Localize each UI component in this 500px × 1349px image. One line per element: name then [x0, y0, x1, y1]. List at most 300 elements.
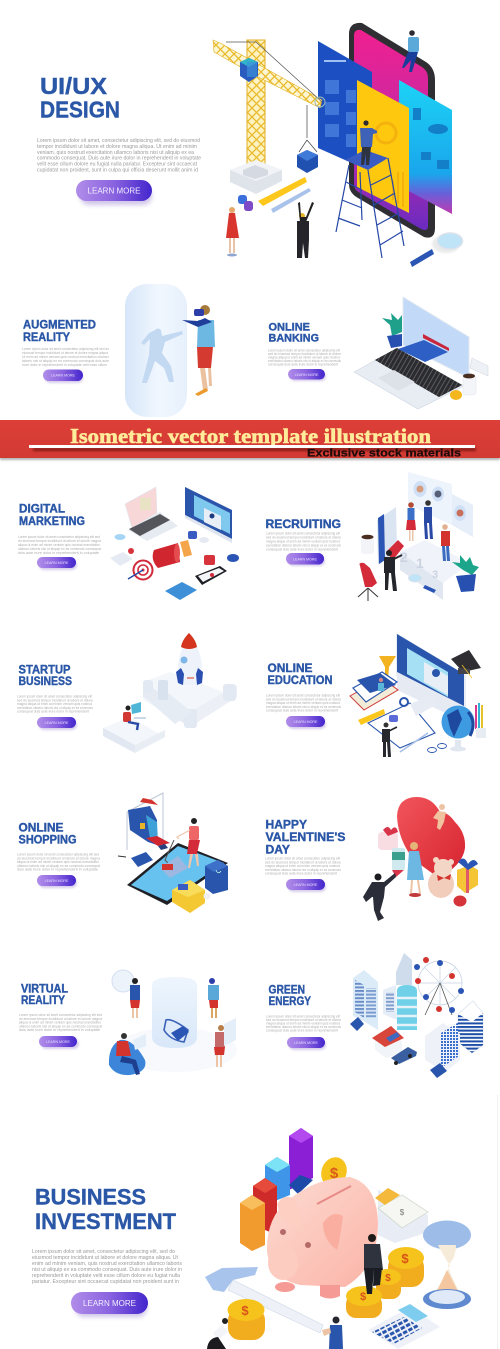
body text: Lorem ipsum dolor sit amet consectetur adipiscing elit — [265, 856, 340, 860]
panel: augmented reality — [22, 284, 215, 417]
floor circle — [113, 1028, 237, 1072]
illustration: digital marketing — [110, 487, 239, 600]
woman with cart — [177, 818, 200, 868]
VR headset — [164, 1020, 189, 1042]
button: learn more — [286, 879, 326, 892]
gear — [400, 698, 408, 706]
orange bar — [240, 1195, 265, 1251]
body text: eiusmod tempor incididunt ut labore et dolore magna aliqua — [22, 351, 108, 355]
cyan panel — [399, 80, 452, 214]
shopping cart — [160, 840, 188, 878]
book — [377, 507, 404, 565]
body text: exercitation ullamco laboris nisi ut aliquip ex ea commodo — [265, 868, 341, 872]
heading: Online Shopping — [18, 823, 77, 846]
body text: consequat duis aute irure dolor in reprehenderit — [266, 708, 338, 712]
banner — [0, 420, 500, 460]
podium — [400, 540, 470, 600]
hologram globe — [112, 970, 134, 992]
body text: sed do eiusmod tempor incididunt ut labore et dolore — [17, 698, 93, 702]
shopping bag — [205, 860, 228, 894]
man with raised arms — [297, 202, 314, 258]
button: learn more: LEARN MORE — [294, 720, 318, 724]
heading: Business Investment: INVESTMENT — [35, 1209, 176, 1234]
heading: Startup Business — [18, 664, 72, 688]
body text: tempor incididunt ut labore et dolore magna aliqua. Ut enim ad minim — [37, 144, 197, 150]
body text — [265, 856, 341, 876]
body text: sed do eiusmod tempor incididunt ut labore et dolore — [266, 1018, 341, 1022]
banner bar — [0, 420, 500, 458]
bar chart — [240, 1128, 313, 1251]
ferris wheel — [418, 961, 462, 1015]
body text: magna aliqua ut enim ad minim veniam quis nostrud — [266, 540, 340, 544]
illustration: AR cylinder with man — [125, 284, 215, 417]
body text: ullamco laboris nisi ut aliquip ex ea commodo consequat — [19, 1024, 102, 1028]
body text: magna aliqua ut enim ad minim veniam quis nostrud — [266, 1022, 340, 1026]
heading: Business Investment — [35, 1184, 176, 1234]
heading: Online Banking: BANKING — [268, 333, 319, 345]
coin above slot — [317, 1154, 351, 1190]
body text: Lorem ipsum dolor sit amet consectetur adipiscing elit sed do — [22, 347, 109, 351]
pencil — [271, 188, 311, 213]
glass cylinder — [125, 284, 187, 417]
button: learn more: LEARN MORE — [295, 373, 319, 377]
hanging clothes — [128, 798, 158, 845]
edge line — [497, 1095, 498, 1349]
body text: sed do eiusmod tempor incididunt ut labore et dolore — [268, 352, 341, 356]
heading: Online Education — [268, 663, 332, 687]
body text — [266, 694, 341, 712]
dark blue block — [289, 1175, 313, 1194]
car — [391, 1047, 417, 1065]
panel: online shopping — [17, 793, 228, 913]
illustration: online shopping — [118, 793, 228, 913]
cylindrical tower — [397, 985, 417, 1030]
body text — [266, 1014, 341, 1032]
house — [372, 1026, 404, 1058]
body text: consequat duis aute irure dolor in reprehenderit — [265, 872, 337, 876]
body text: do eiusmod tempor incididunt ut labore et dolore magna — [17, 856, 100, 860]
body text: Lorem ipsum dolor sit amet, consectetur adipiscing elit, sed do eiusmod — [37, 138, 200, 144]
body text: duis aute irure dolor in reprehenderit in voluptate — [18, 551, 99, 555]
button: learn more: LEARN MORE — [51, 374, 75, 378]
manager — [384, 550, 402, 591]
panel: recruiting — [266, 472, 479, 601]
illustration: valentine — [363, 797, 478, 921]
body text: veniam, quis nostrud exercitation ullamco laboris nisi ut aliquip ex ea — [37, 150, 194, 156]
clothes rack — [127, 793, 163, 850]
man with pointer — [382, 722, 397, 757]
coin stack small: $ — [360, 1291, 366, 1303]
chat tag — [389, 715, 398, 722]
body text: Lorem ipsum dolor sit amet consectetur adipiscing elit — [266, 1014, 340, 1018]
heading: UI/UX Design: UI/UX — [40, 73, 107, 99]
pink gift — [378, 827, 398, 850]
body text: ullamco laboris nisi ut aliquip ex ea commodo consequat — [18, 547, 101, 551]
body text: do eiusmod tempor incididunt ut labore et dolore magna — [19, 1017, 102, 1021]
front building — [425, 1022, 460, 1072]
woman in red — [226, 207, 239, 256]
heading: Startup Business: BUSINESS — [18, 676, 72, 688]
body text — [32, 1249, 182, 1285]
chart on yellow panel — [376, 123, 403, 207]
illustration: startup rocket — [103, 633, 237, 753]
red item — [146, 836, 170, 846]
cylinders — [143, 680, 236, 728]
button: learn more: LEARN MORE — [294, 1041, 318, 1045]
launch platform — [143, 672, 237, 727]
keyboard — [375, 348, 462, 397]
body text: irure dolor in reprehenderit in voluptate velit esse cillum — [22, 363, 107, 367]
heading: Digital Marketing: MARKETING — [19, 516, 85, 528]
hammer — [205, 1267, 323, 1333]
books upright — [475, 703, 486, 738]
graduation cap — [451, 650, 481, 678]
gift box — [457, 858, 478, 893]
coin above slot: $ — [330, 1165, 339, 1182]
body text: velit esse cillum dolore eu fugiat nulla pariatur. Excepteur sint occaecat — [37, 162, 198, 168]
coin stack front — [228, 1299, 265, 1340]
button: learn more — [37, 875, 77, 888]
coin stack medium: $ — [385, 1273, 391, 1284]
illustration: laptop with card — [354, 297, 488, 409]
body text: nisi ut aliquip ex ea commodo consequat. Duis aute irure dolor in — [32, 1267, 182, 1273]
podium: 3 — [432, 569, 438, 581]
heading: Happy Valentine's Day — [266, 818, 346, 856]
illustration: recruiting — [358, 472, 479, 601]
panel: virtual reality — [19, 970, 237, 1075]
heading: UI/UX Design — [40, 73, 120, 122]
laptop screen — [403, 297, 469, 378]
panel: startup business — [17, 633, 237, 753]
man kneeling — [363, 873, 396, 921]
button: learn more — [39, 1036, 79, 1049]
banner shadow — [0, 456, 500, 460]
person on phone — [402, 30, 419, 72]
laptop base — [354, 349, 464, 409]
crane — [213, 40, 325, 194]
book stack — [350, 672, 398, 710]
documents — [470, 358, 488, 376]
purple bar — [289, 1128, 313, 1190]
banner title: Isometric vector template illustration — [70, 424, 431, 448]
heading: UI/UX Design: DESIGN — [40, 96, 120, 122]
monitor — [396, 633, 466, 720]
button: learn more — [286, 716, 326, 729]
button: learn more: LEARN MORE — [88, 186, 140, 196]
body text: Lorem ipsum dolor sit amet consectetur adipiscing elit — [266, 694, 340, 698]
hourglass — [423, 1220, 471, 1309]
body text: magna aliqua ut enim ad minim veniam quis nostrud — [17, 702, 92, 706]
button: learn more — [37, 557, 77, 570]
button: learn more — [288, 369, 326, 381]
body text: aliqua ut enim ad minim veniam quis nostrud exercitation — [18, 543, 100, 547]
panel: UI/UX design — [37, 23, 462, 267]
button: learn more — [286, 553, 325, 566]
illustration: UI/UX construction — [213, 23, 462, 267]
body text: eiusmod tempor incididunt ut labore et dolore magna aliqua. Ut — [32, 1255, 179, 1261]
body text: exercitation ullamco laboris nisi ut aliquip ex ea commodo — [17, 706, 93, 710]
bottle — [392, 848, 405, 877]
heading: Green Energy: GREEN — [268, 984, 305, 996]
body text: pariatur. Excepteur sint occaecat cupidatat non proident sunt in — [32, 1279, 179, 1285]
VR man — [182, 305, 215, 396]
right striped tower — [458, 1001, 483, 1053]
cyan bar — [265, 1157, 290, 1205]
heading: Happy Valentine's Day: VALENTINE'S — [266, 830, 346, 844]
heart — [397, 797, 465, 876]
woman bottom — [322, 1316, 343, 1349]
shoes — [158, 844, 168, 850]
body text: consequat duis aute irure dolor in reprehenderit — [266, 1028, 338, 1032]
illustration: virtual reality — [109, 970, 237, 1075]
body text: magna aliqua ut enim ad minim veniam quis nostrud — [265, 864, 340, 868]
mouse and keyboard — [110, 537, 209, 566]
businessman — [364, 1234, 383, 1294]
button: learn more — [76, 180, 152, 205]
monitor — [185, 487, 232, 543]
body text: consequat duis aute irure dolor in reprehenderit — [268, 362, 338, 366]
body text — [22, 347, 109, 367]
plant — [382, 313, 402, 348]
heading: Happy Valentine's Day: DAY — [266, 842, 290, 856]
coffee cup — [361, 535, 374, 554]
body text: exercitation ullamco laboris nisi ut aliquip ex ea commodo — [268, 359, 341, 363]
heading: Virtual Reality: VIRTUAL — [21, 983, 68, 995]
body text: reprehenderit in voluptate velit esse cillum dolore eu fugiat nulla — [32, 1273, 180, 1279]
cupid — [433, 804, 446, 830]
body text: commodo consequat. Duis aute irure dolor in reprehenderit in voluptate — [37, 156, 201, 162]
globe — [442, 706, 474, 752]
coin stack large: $ — [401, 1251, 409, 1266]
heading: Virtual Reality: REALITY — [21, 995, 65, 1007]
ladder platform — [345, 150, 388, 170]
body text — [268, 348, 341, 366]
gondolas — [414, 957, 464, 1013]
chat bubbles — [238, 195, 253, 211]
podium: 2 — [400, 549, 408, 565]
heading: Online Banking — [268, 322, 319, 345]
body text: do eiusmod tempor incididunt ut labore et dolore magna — [18, 539, 101, 543]
candidate woman — [406, 502, 416, 541]
blue panel — [318, 41, 372, 172]
body text: Lorem ipsum dolor sit amet, consectetur adipiscing elit, sed do — [32, 1249, 175, 1255]
CV cards — [408, 472, 473, 537]
person at desk — [123, 702, 146, 730]
body text: magna aliqua ut enim ad minim veniam quis nostrud — [268, 356, 340, 360]
body text — [19, 1013, 102, 1032]
mid buildings — [383, 953, 412, 1020]
money stack: $ — [400, 1208, 405, 1217]
pink laptop — [125, 487, 178, 541]
heading: Augmented Reality: REALITY — [23, 330, 70, 344]
coin stack front: $ — [241, 1303, 249, 1318]
heading: Online Shopping: ONLINE — [18, 823, 64, 835]
person reading — [378, 678, 384, 691]
calculator — [368, 1304, 440, 1349]
woman with VR — [130, 978, 140, 1018]
button: learn more: LEARN MORE — [45, 879, 69, 883]
button: learn more: LEARN MORE — [83, 1299, 136, 1308]
button: learn more — [287, 1037, 326, 1050]
podium: 1 — [416, 555, 424, 571]
glasses — [428, 744, 446, 752]
body text — [18, 535, 101, 555]
body text: Lorem ipsum dolor sit amet consectetur adipiscing elit sed — [19, 1013, 102, 1017]
button: learn more: LEARN MORE — [293, 557, 317, 561]
body text: duis aute irure dolor in reprehenderit in voluptate — [19, 1028, 100, 1032]
body text: Lorem ipsum dolor sit amet consectetur adipiscing elit — [266, 532, 340, 536]
body text: ullamco laboris nisi ut aliquip ex ea commodo consequat — [17, 864, 100, 868]
coin stacks — [346, 1247, 424, 1318]
button: learn more — [37, 717, 77, 730]
target — [128, 560, 152, 580]
woman right — [214, 1025, 225, 1067]
red ball — [454, 896, 466, 906]
body text: duis aute irure dolor in reprehenderit in voluptate — [17, 868, 98, 872]
stairway — [150, 693, 192, 724]
magnifier — [410, 233, 462, 267]
body text: consequat duis aute irure dolor in reprehenderit — [266, 548, 338, 552]
notebook — [368, 695, 436, 748]
illustration: green city — [350, 953, 483, 1078]
ruler — [258, 177, 307, 206]
funnel — [379, 656, 396, 680]
button: learn more: LEARN MORE — [45, 561, 69, 565]
heading: Business Investment: BUSINESS — [35, 1184, 146, 1209]
heading: Online Education: ONLINE — [268, 663, 313, 675]
heading: Virtual Reality — [21, 983, 68, 1007]
illustration: online education — [350, 633, 486, 757]
phone platform — [127, 843, 228, 905]
candidate man — [424, 500, 433, 539]
button: learn more: LEARN MORE — [294, 883, 318, 887]
heading: Green Energy — [268, 984, 311, 1008]
heading: Digital Marketing — [19, 504, 85, 528]
card — [398, 340, 448, 362]
body text — [17, 694, 93, 714]
pencil — [400, 733, 428, 752]
ruler — [358, 709, 385, 725]
button: learn more — [71, 1292, 148, 1317]
body text: Lorem ipsum dolor sit amet consectetur adipiscing elit sed — [17, 852, 99, 856]
button: learn more: LEARN MORE — [46, 1040, 70, 1044]
man with VR — [208, 978, 219, 1018]
body text: Lorem ipsum dolor sit amet consectetur adipiscing elit sed — [18, 535, 100, 539]
crane counterweight — [240, 58, 258, 82]
icons on blue panel — [324, 60, 356, 147]
body text: sed do eiusmod tempor incididunt ut labore et dolore — [266, 536, 341, 540]
phone — [349, 23, 435, 238]
button: learn more — [43, 370, 83, 383]
heading: Recruiting: RECRUITING — [266, 517, 341, 531]
body text: enim ad minim veniam, quis nostrud exercitation ullamco laboris — [32, 1261, 182, 1267]
banner subtitle: Exclusive stock materials — [307, 448, 461, 460]
body text: aliqua ut enim ad minim veniam quis nostrud exercitation — [19, 1020, 101, 1024]
hologram screen — [224, 1018, 236, 1046]
solar panels — [350, 1017, 447, 1078]
panel: online education — [266, 633, 486, 757]
lower platform — [103, 717, 165, 753]
person on ladder — [360, 120, 377, 165]
body text: sed do eiusmod tempor incididunt ut labore et dolore — [265, 860, 341, 864]
body text: exercitation ullamco laboris nisi ut aliquip ex ea commodo — [266, 1025, 341, 1029]
card slot — [423, 334, 449, 351]
panel: digital marketing — [18, 487, 239, 600]
heading: Augmented Reality: AUGMENTED — [23, 318, 96, 332]
button: learn more: LEARN MORE — [45, 721, 69, 725]
body text: sed do eiusmod tempor incididunt ut labore et dolore — [266, 697, 341, 701]
glass cylinder — [152, 977, 197, 1048]
body text: exercitation ullamco laboris nisi ut aliquip ex ea commodo — [266, 705, 341, 709]
woman in blue — [407, 842, 424, 897]
map on cyan panel — [413, 108, 449, 169]
heading: Digital Marketing: DIGITAL — [19, 504, 65, 516]
body text: exercitation ullamco laboris nisi ut aliquip ex ea commodo — [266, 544, 341, 548]
coffee cup — [463, 374, 476, 395]
hanging cube — [297, 105, 318, 173]
red bar — [253, 1178, 277, 1235]
tablet — [165, 582, 197, 600]
coins — [450, 390, 462, 400]
banner rule — [29, 445, 475, 448]
panel: green energy — [266, 953, 483, 1078]
heading: Startup Business: STARTUP — [18, 664, 71, 676]
phone — [195, 566, 227, 585]
silhouette figure — [141, 328, 183, 383]
yellow panel — [357, 80, 409, 213]
robot tower — [158, 680, 168, 700]
body text: Lorem ipsum dolor sit amet consectetur adipiscing elit — [17, 694, 92, 698]
ball — [204, 892, 210, 900]
money stack — [355, 1178, 428, 1243]
yellow box — [172, 880, 205, 913]
megaphone — [153, 540, 192, 568]
panel: business investment — [32, 1128, 471, 1349]
ladder — [336, 158, 404, 258]
body text: aliqua ut enim ad minim veniam quis nostrud exercitation — [17, 860, 99, 864]
magnifier — [408, 574, 436, 593]
candidate in red — [441, 524, 450, 561]
bean bag with man — [109, 1033, 146, 1075]
suitcase — [118, 852, 153, 867]
person bottom left — [207, 1318, 228, 1349]
body text: Ut enim ad minim veniam quis nostrud exercitation ullamco — [22, 355, 109, 359]
heading: Online Education: EDUCATION — [268, 675, 332, 687]
illustration: piggy bank investment — [205, 1128, 471, 1349]
body text: consequat duis aute irure dolor in reprehenderit — [17, 710, 89, 714]
body text: Lorem ipsum dolor sit amet consectetur adipiscing elit — [268, 348, 340, 352]
body text: cupidatat non proident, sunt in culpa qui officia deserunt mollit anim id — [37, 167, 198, 173]
keys — [375, 348, 462, 397]
body text — [17, 852, 100, 872]
body text — [37, 138, 201, 173]
touchpad — [378, 370, 415, 391]
small social icons — [114, 531, 239, 565]
heading: Green Energy: ENERGY — [268, 996, 311, 1008]
banner rule shadow — [33, 448, 476, 451]
red chair — [358, 563, 378, 601]
left tower — [353, 970, 378, 1030]
body text: laboris nisi ut aliquip ex ea commodo consequat duis aute — [22, 359, 109, 363]
rocket — [176, 633, 203, 685]
panel: happy valentine's day — [265, 797, 478, 921]
panel: online banking — [268, 297, 488, 409]
piggy bank — [267, 1177, 378, 1298]
heading: Online Shopping: SHOPPING — [18, 834, 77, 846]
body text — [266, 532, 341, 552]
heading: Augmented Reality — [23, 318, 96, 344]
heading: Online Banking: ONLINE — [268, 322, 310, 334]
